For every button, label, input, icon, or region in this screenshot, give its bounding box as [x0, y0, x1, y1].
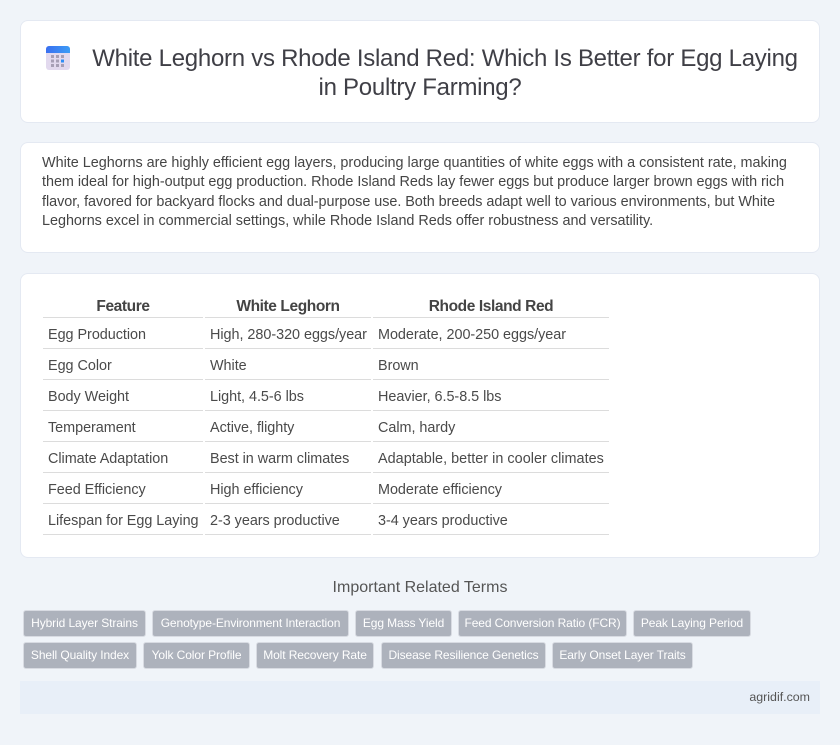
- comparison table: Moderate efficiency: [378, 482, 502, 498]
- icon: calendar: [46, 46, 70, 70]
- comparison table: 2-3 years productive: [210, 513, 340, 529]
- comparison table: Egg Color: [48, 358, 112, 374]
- comparison table: [43, 298, 609, 535]
- comparison table: Moderate, 200-250 eggs/year: [378, 327, 566, 343]
- related term tags: Early Onset Layer Traits: [559, 648, 686, 662]
- comparison table: Egg Production: [48, 327, 146, 343]
- related term tags: Shell Quality Index: [31, 648, 129, 662]
- related term tags: Molt Recovery Rate: [263, 648, 367, 662]
- title: [92, 45, 798, 101]
- comparison table: Heavier, 6.5-8.5 lbs: [378, 389, 501, 405]
- comparison table: Calm, hardy: [378, 420, 455, 436]
- related term tags: Disease Resilience Genetics: [388, 648, 539, 662]
- panel: summary card: [20, 142, 820, 253]
- comparison table: Brown: [378, 358, 419, 374]
- panel: title card: [20, 20, 820, 123]
- footer text: source: agridif.com: [749, 690, 810, 704]
- related term tags: Feed Conversion Ratio (FCR): [464, 616, 621, 630]
- comparison table: Temperament: [48, 420, 136, 436]
- related term tags: Egg Mass Yield: [363, 616, 444, 630]
- related term tags: Hybrid Layer Strains: [31, 616, 138, 630]
- text block: summary paragraph: White Leghorns are highly efficient egg layers, producing large quantities of white eggs with a consistent rate, making: [42, 155, 787, 171]
- comparison table: Light, 4.5-6 lbs: [210, 389, 304, 405]
- footer bar: [20, 681, 820, 714]
- comparison table: Lifespan for Egg Laying: [48, 513, 199, 529]
- heading: related terms: Important Related Terms: [333, 579, 507, 596]
- comparison table: High efficiency: [210, 482, 303, 498]
- comparison table: Climate Adaptation: [48, 451, 168, 467]
- comparison table: Active, flighty: [210, 420, 294, 436]
- comparison table: White: [210, 358, 247, 374]
- related term tags: Peak Laying Period: [641, 616, 743, 630]
- comparison table: Feature: [96, 298, 150, 315]
- text block: summary paragraph: them ideal for high-output egg production. Rhode Island Reds lay fewer eggs but produce larger brown eggs with rich: [42, 174, 784, 190]
- comparison table: 3-4 years productive: [378, 513, 508, 529]
- comparison table: High, 280-320 eggs/year: [210, 327, 367, 343]
- comparison table: Best in warm climates: [210, 451, 349, 467]
- text block: summary paragraph: [42, 155, 787, 229]
- text block: summary paragraph: Leghorns excel in commercial settings, while Rhode Island Reds offer robustness and versatility.: [42, 213, 653, 229]
- comparison table: Adaptable, better in cooler climates: [378, 451, 604, 467]
- related term tags: Yolk Color Profile: [152, 648, 241, 662]
- comparison table: Rhode Island Red: [429, 298, 553, 315]
- comparison table: Feed Efficiency: [48, 482, 146, 498]
- panel: table card: [20, 273, 820, 558]
- related term tags: Genotype-Environment Interaction: [161, 616, 340, 630]
- title: White Leghorn vs Rhode Island Red: Which Is Better for Egg Laying: [92, 45, 798, 72]
- comparison table: Body Weight: [48, 389, 129, 405]
- comparison table: White Leghorn: [236, 298, 340, 315]
- text block: summary paragraph: flavor, favored for backyard flocks and dual-purpose use. Both breeds adapt well to various environments, but White: [42, 194, 775, 210]
- title: in Poultry Farming?: [319, 74, 521, 101]
- related term tags: [23, 610, 751, 669]
